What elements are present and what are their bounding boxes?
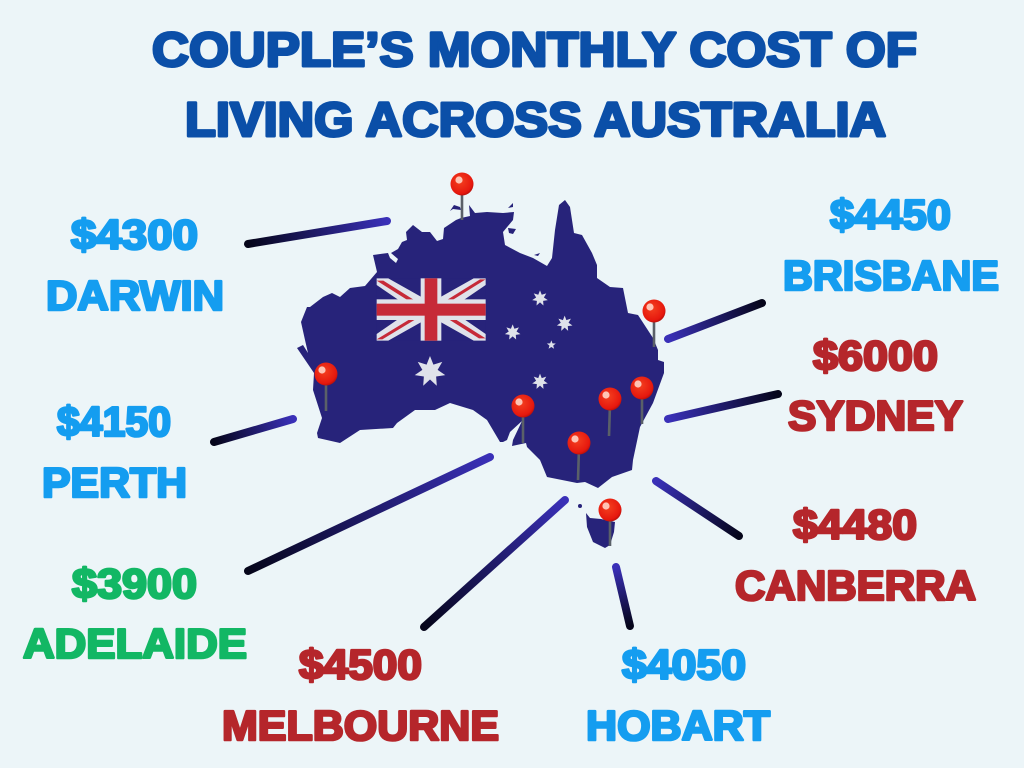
- label: Melbourne: [222, 641, 499, 749]
- label: Sydney: $6000: [813, 332, 938, 379]
- pin: Adelaide: [512, 394, 534, 443]
- label: Brisbane: $4450: [830, 191, 951, 238]
- label: Brisbane: [783, 191, 999, 299]
- connector lines: [214, 221, 778, 627]
- label: Melbourne: $4500: [299, 641, 422, 688]
- stars: [415, 290, 572, 389]
- map of Australia with flag: [297, 200, 664, 548]
- label: Adelaide: [23, 560, 247, 667]
- label: Darwin: DARWIN: [46, 272, 224, 319]
- label: Canberra: [735, 501, 976, 609]
- label: Melbourne: MELBOURNE: [222, 702, 499, 749]
- pin: Melbourne: [568, 432, 590, 480]
- label: Hobart: HOBART: [586, 702, 770, 749]
- title: LIVING ACROSS AUSTRALIA: [185, 94, 886, 147]
- pin: Brisbane: [642, 300, 666, 347]
- mainland: [297, 200, 664, 488]
- label: Adelaide: $3900: [72, 560, 197, 607]
- Gulf of Carpentaria islands: [508, 203, 540, 256]
- label: Sydney: [788, 332, 963, 439]
- map pins: [314, 172, 666, 546]
- title: COUPLE’S MONTHLY COST OF: [152, 24, 917, 77]
- label: Canberra: $4480: [793, 501, 917, 548]
- flag: union jack: [377, 278, 486, 341]
- label: Canberra: CANBERRA: [735, 562, 976, 609]
- Tasmania: [578, 504, 615, 548]
- label: Perth: [42, 398, 187, 506]
- pin: Darwin: [450, 172, 474, 220]
- label: Perth: PERTH: [42, 459, 187, 506]
- pin: Canberra: [598, 388, 622, 436]
- Tiwi islands: [450, 205, 461, 211]
- pin: Sydney: [630, 376, 654, 424]
- label: Darwin: [46, 211, 224, 319]
- label: Perth: $4150: [57, 398, 171, 445]
- label: Sydney: SYDNEY: [788, 392, 963, 439]
- pin: Hobart: [598, 498, 622, 546]
- label: Hobart: [586, 641, 770, 749]
- label: Brisbane: BRISBANE: [783, 252, 999, 299]
- title: [152, 24, 917, 147]
- label: Hobart: $4050: [622, 641, 746, 688]
- label: Darwin: $4300: [71, 211, 198, 258]
- label: Adelaide: ADELAIDE: [23, 620, 247, 667]
- pin: Perth: [314, 362, 338, 411]
